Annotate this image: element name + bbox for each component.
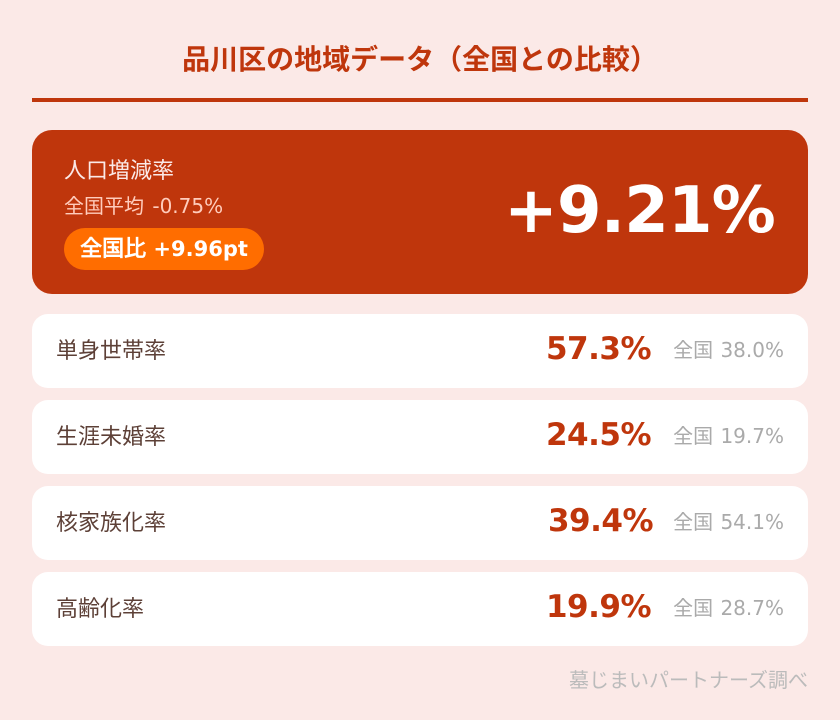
label: 核家族化率 [56,511,166,536]
source note: 墓じまいパートナーズ調べ [569,668,808,692]
population label: 人口増減率 [64,159,174,184]
title: 品川区の地域データ（全国との比較） [182,38,658,78]
title rule [32,98,808,102]
national comparison: 全国 38.0% [673,338,784,362]
value: 19.9% [546,589,651,625]
badge: difference from national: 全国比 +9.96pt [80,237,248,262]
label: 生涯未婚率 [56,425,166,450]
row: nuclear family [32,486,808,560]
national comparison: 全国 28.7% [673,596,784,620]
national comparison: 全国 19.7% [673,424,784,448]
national comparison: 全国 54.1% [673,510,784,534]
row: single households [32,314,808,388]
panel: population change [32,130,808,294]
row: aging [32,572,808,646]
value: 24.5% [546,417,651,453]
row: lifetime unmarried [32,400,808,474]
value: 57.3% [546,331,651,367]
label: 高齢化率 [56,597,144,622]
badge: difference from national [64,228,264,270]
national average: 全国平均 -0.75% [64,194,223,218]
value: 39.4% [548,503,653,539]
label: 単身世帯率 [56,339,166,364]
main value: +9.21% [504,174,775,248]
